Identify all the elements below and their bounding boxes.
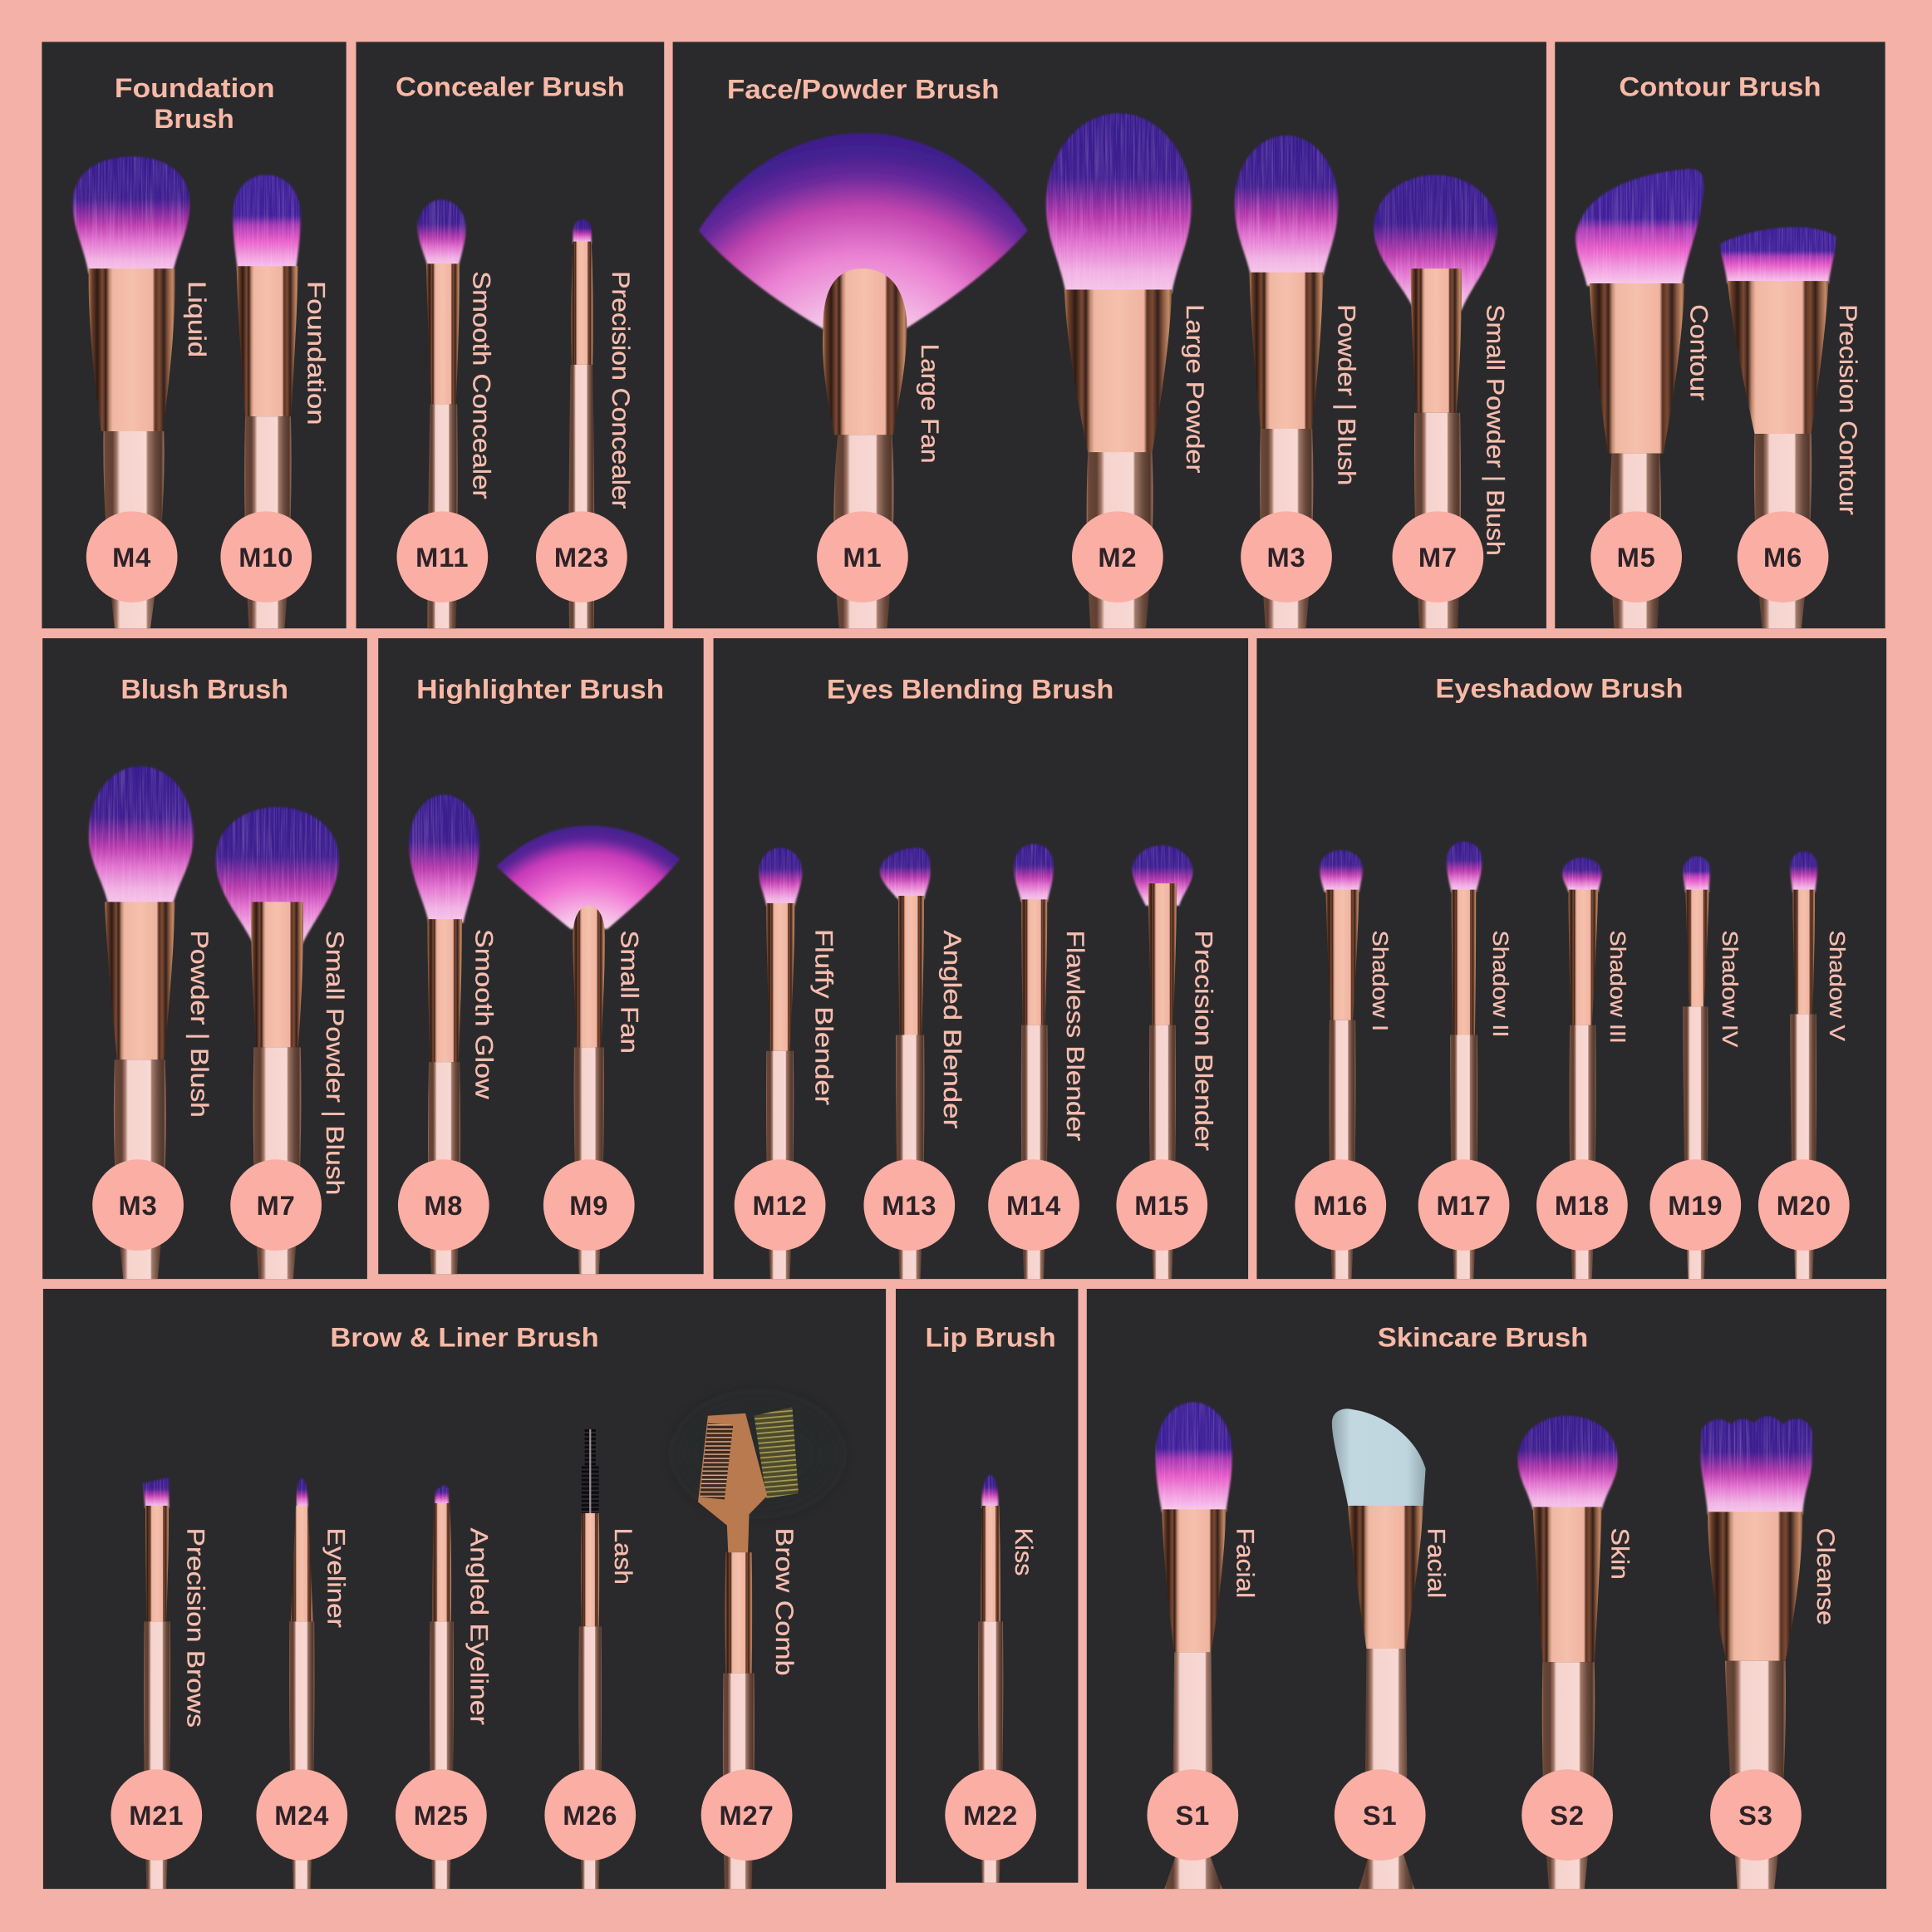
brush: M12 fluffy blender: Fluffy Blender <box>810 929 838 1105</box>
panel: eyeshadow brush <box>1256 638 1886 1279</box>
brush: M3 powder blush: Powder | Blush <box>1332 304 1359 485</box>
brush: M19 shadow IV <box>1649 857 1741 1279</box>
brush: M27 brow comb <box>684 1404 832 1889</box>
brush: S1 facial <box>1147 1402 1259 1889</box>
panel: skincare brush <box>1087 1289 1886 1889</box>
brush: M23 precision concealer: Precision Concealer <box>607 271 634 509</box>
brush: M21 precision brows <box>111 1477 209 1889</box>
panel: blush brush <box>42 638 367 1279</box>
brush: M2 large powder: M2 <box>1098 542 1137 573</box>
heading: foundation brush: Brush <box>154 103 234 134</box>
brush: S3 cleanse: Cleanse <box>1812 1528 1839 1625</box>
brush: S1 silicone facial: Facial <box>1423 1528 1450 1598</box>
brush: M24 eyeliner: Eyeliner <box>322 1528 349 1628</box>
brush: S1 facial: Facial <box>1231 1528 1259 1598</box>
heading: contour brush: Contour Brush <box>1619 71 1821 102</box>
brush: M13 angled blender <box>863 848 966 1279</box>
brush: M10 foundation <box>220 175 330 628</box>
brush: M6 precision contour <box>1720 227 1861 628</box>
brush: M9 small fan: Small Fan <box>615 930 642 1054</box>
brush: S2 skin: Skin <box>1605 1528 1633 1580</box>
brush: M10 foundation: M10 <box>238 542 293 573</box>
brush: M26 lash: Lash <box>609 1528 637 1585</box>
brush: M10 foundation: Foundation <box>302 281 330 425</box>
brush: M26 lash <box>544 1429 637 1889</box>
panel: lip brush <box>896 1289 1078 1883</box>
brush: M11 smooth concealer: M11 <box>415 542 469 573</box>
panel: contour brush <box>1555 42 1885 628</box>
brush: M11 smooth concealer <box>396 199 494 628</box>
heading: foundation brush: Foundation <box>115 72 275 103</box>
brush: M12 fluffy blender: M12 <box>753 1190 808 1221</box>
heading: highlighter brush: Highlighter Brush <box>416 674 664 705</box>
brush: M5 contour <box>1576 169 1712 628</box>
brush: M25 angled eyeliner <box>396 1485 492 1889</box>
brush: M9 small fan <box>497 825 680 1274</box>
panel: face/powder brush <box>673 42 1546 628</box>
brush: S2 skin: S2 <box>1550 1800 1585 1831</box>
brush: M3 powder blush: Powder | Blush <box>185 930 213 1118</box>
brush: S1 silicone facial <box>1332 1408 1450 1889</box>
brush: M19 shadow IV: M19 <box>1668 1190 1723 1221</box>
brush: M16 shadow I: M16 <box>1313 1190 1368 1221</box>
brush: M26 lash: M26 <box>563 1800 617 1831</box>
brush: M3 powder blush <box>1235 135 1359 628</box>
panel: highlighter brush <box>378 638 704 1274</box>
brush: M3 powder blush: M3 <box>1266 542 1306 573</box>
brush: M20 shadow V: Shadow V <box>1825 930 1848 1042</box>
brush: M20 shadow V <box>1758 852 1850 1279</box>
brush: M5 contour: Contour <box>1684 304 1712 401</box>
brush: M17 shadow II <box>1418 842 1512 1279</box>
brush: M8 smooth glow <box>398 794 497 1274</box>
brush: M20 shadow V: M20 <box>1777 1190 1831 1221</box>
brush: M24 eyeliner <box>256 1478 349 1889</box>
brush: M3 powder blush <box>89 766 213 1279</box>
heading: eyeshadow brush: Eyeshadow Brush <box>1435 672 1683 703</box>
brush: M12 fluffy blender <box>735 848 838 1279</box>
panel: foundation brush <box>42 42 347 628</box>
brush: M14 flawless blender <box>988 844 1089 1279</box>
brush: S1 facial: S1 <box>1175 1800 1210 1831</box>
brush: M7 small powder blush: M7 <box>1418 542 1458 573</box>
brush: M17 shadow II: M17 <box>1436 1190 1492 1221</box>
brush: M1 large fan: M1 <box>843 542 882 573</box>
heading: brow and liner brush: Brow & Liner Brush <box>330 1322 599 1353</box>
brush: M7 small powder blush <box>215 807 348 1279</box>
brush: M3 powder blush: M3 <box>119 1190 158 1221</box>
brush: M22 kiss: Kiss <box>1010 1528 1037 1576</box>
panel: eyes blending brush <box>714 638 1248 1279</box>
brush: M18 shadow III <box>1536 858 1629 1279</box>
brush: M24 eyeliner: M24 <box>274 1800 329 1831</box>
brush: M19 shadow IV: Shadow IV <box>1718 930 1741 1048</box>
brush: M16 shadow I: Shadow I <box>1368 930 1391 1031</box>
brush: M15 precision blender <box>1116 845 1217 1279</box>
brush: M23 precision concealer: M23 <box>554 542 609 573</box>
brush: M21 precision brows: Precision Brows <box>181 1528 209 1728</box>
brush: M14 flawless blender: M14 <box>1006 1190 1061 1221</box>
brush: M2 large powder: Large Powder <box>1181 304 1208 474</box>
heading: blush brush: Blush Brush <box>120 674 288 705</box>
brush: M18 shadow III: M18 <box>1555 1190 1610 1221</box>
brush: S2 skin <box>1518 1416 1633 1889</box>
brush: S3 cleanse: S3 <box>1738 1800 1773 1831</box>
brush: M21 precision brows: M21 <box>129 1800 184 1831</box>
brush: M25 angled eyeliner: M25 <box>414 1800 469 1831</box>
brush: M8 smooth glow: M8 <box>424 1190 463 1221</box>
brush: M6 precision contour: M6 <box>1763 542 1802 573</box>
brush: M7 small powder blush: M7 <box>257 1190 296 1221</box>
heading: lip brush: Lip Brush <box>926 1322 1056 1353</box>
brush: M15 precision blender: M15 <box>1134 1190 1189 1221</box>
brush: M4 liquid: Liquid <box>183 281 210 357</box>
brush: M27 brow comb: Brow Comb <box>770 1528 798 1676</box>
brush: M7 small powder blush: Small Powder | Blush <box>321 930 348 1195</box>
heading: concealer brush: Concealer Brush <box>396 71 625 102</box>
brush: M15 precision blender: Precision Blender <box>1189 930 1217 1151</box>
brush: M1 large fan: Large Fan <box>916 344 943 464</box>
brush: M9 small fan: M9 <box>569 1190 608 1221</box>
brush: M4 liquid: M4 <box>112 542 151 573</box>
brush: S3 cleanse <box>1700 1416 1839 1889</box>
brush: M7 small powder blush <box>1374 175 1509 628</box>
brush: M13 angled blender: Angled Blender <box>938 930 966 1128</box>
brush: M14 flawless blender: Flawless Blender <box>1061 930 1089 1141</box>
brush: M16 shadow I <box>1295 850 1391 1279</box>
brush: M7 small powder blush: Small Powder | Blush <box>1482 304 1509 556</box>
brush: S1 silicone facial: S1 <box>1363 1800 1398 1831</box>
brush: M4 liquid <box>72 156 210 628</box>
brush: M8 smooth glow: Smooth Glow <box>469 929 497 1099</box>
brush: M18 shadow III: Shadow III <box>1605 930 1629 1044</box>
heading: skincare brush: Skincare Brush <box>1378 1322 1588 1353</box>
brush: M17 shadow II: Shadow II <box>1488 930 1512 1038</box>
brush: M27 brow comb: M27 <box>720 1800 774 1831</box>
brush: M23 precision concealer <box>536 219 634 628</box>
brush: M5 contour: M5 <box>1617 542 1656 573</box>
brush: M1 large fan <box>699 133 1028 628</box>
brush: M13 angled blender: M13 <box>882 1190 937 1221</box>
panel: brow and liner brush <box>43 1289 886 1889</box>
panel: concealer brush <box>356 42 664 628</box>
brush: M6 precision contour: Precision Contour <box>1834 304 1861 515</box>
brush: M11 smooth concealer: Smooth Concealer <box>467 271 494 499</box>
brush: M22 kiss: M22 <box>963 1800 1018 1831</box>
heading: eyes blending brush: Eyes Blending Brush <box>827 674 1113 705</box>
brush: M25 angled eyeliner: Angled Eyeliner <box>465 1528 492 1725</box>
brush: M22 kiss <box>945 1475 1037 1883</box>
heading: face/powder brush: Face/Powder Brush <box>727 74 1000 105</box>
heading: foundation brush <box>115 72 275 134</box>
brush: M2 large powder <box>1046 113 1208 628</box>
